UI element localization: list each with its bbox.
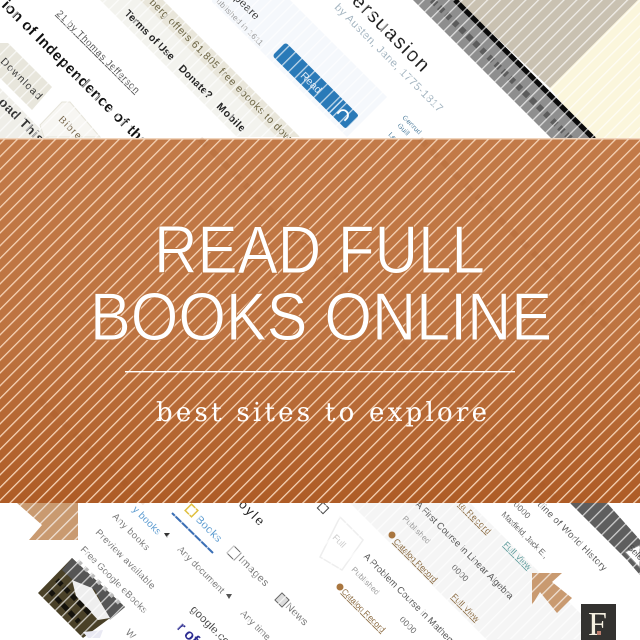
full view link: Full View [450, 591, 483, 624]
icon: images [227, 546, 241, 560]
author: Maxfield: Maxfield, Jack E., [500, 509, 550, 560]
top screenshot collage [0, 0, 445, 150]
record numbers: 0000 [398, 614, 419, 636]
tab: books: Books [193, 514, 224, 545]
checkbox [317, 502, 329, 514]
book author: by Austen, Jane, 1775-1817 [332, 2, 445, 115]
related links: Lex [387, 131, 400, 145]
related links: Guill [396, 122, 411, 138]
byline: Thomas Jefferson: 21 by Thomas Jefferson [54, 8, 142, 96]
option: free ebooks: Free Google eBooks [78, 544, 149, 616]
published labels: Published [401, 514, 432, 546]
catalog: world history: tline of World History [535, 499, 609, 574]
catalog record links: Catalog Record [340, 586, 388, 635]
published labels: Published [350, 565, 381, 597]
option: any books: Any books [110, 511, 152, 553]
record numbers: 0000 [450, 562, 471, 584]
ghost diagonal marks [40, 139, 610, 503]
arrow: bottom left [17, 503, 78, 540]
filter: any books: y books [130, 504, 163, 538]
published labels [350, 514, 432, 597]
orange title band [0, 138, 640, 503]
related links: Gertrud [401, 114, 422, 136]
book spine and page corner [413, 0, 640, 139]
related links [387, 114, 422, 145]
catalog record links: ta Record [457, 499, 494, 536]
filter: document: Any document [175, 544, 227, 596]
record icons [336, 532, 396, 590]
record numbers: 0000 [512, 499, 533, 521]
catalog record links: Catalog Record [392, 536, 440, 585]
full view link: Full View [502, 539, 535, 572]
read button [272, 42, 359, 129]
banner: Gutenberg offers: berg offers 61,805 free ebooks to downl [147, 0, 300, 150]
nav: donate: Donate? [176, 63, 215, 102]
record numbers [398, 499, 533, 636]
title: BOOKS ONLINE [90, 279, 552, 355]
nav: mobile: Mobile [214, 101, 248, 135]
tab: news: News [283, 601, 310, 628]
arrow: bottom right [532, 573, 572, 613]
logo [581, 604, 616, 640]
faint thumbnail label: Full [331, 532, 348, 550]
search query: oyle [236, 497, 268, 528]
catalog: first course: A First Course in Linear Algebra [413, 499, 516, 602]
title [90, 212, 552, 355]
bottom screenshot collage [38, 497, 640, 640]
icon: dropdown arrow [164, 533, 170, 538]
tab: images: Images [236, 554, 271, 589]
icon: books logo [185, 504, 198, 517]
button: bibrec: Bibrec [56, 114, 88, 146]
logo dot [597, 631, 601, 635]
title: READ FULL [154, 212, 485, 288]
icon: headphones [337, 108, 350, 121]
thumbnail photo [38, 558, 125, 638]
nav: terms: Terms of Use [122, 8, 177, 63]
subtitle: best sites to explore [156, 398, 487, 428]
catalog record links [340, 499, 494, 635]
option: preview: Preview available [93, 527, 157, 592]
icon: news [275, 593, 289, 607]
button label: Read [298, 70, 324, 96]
